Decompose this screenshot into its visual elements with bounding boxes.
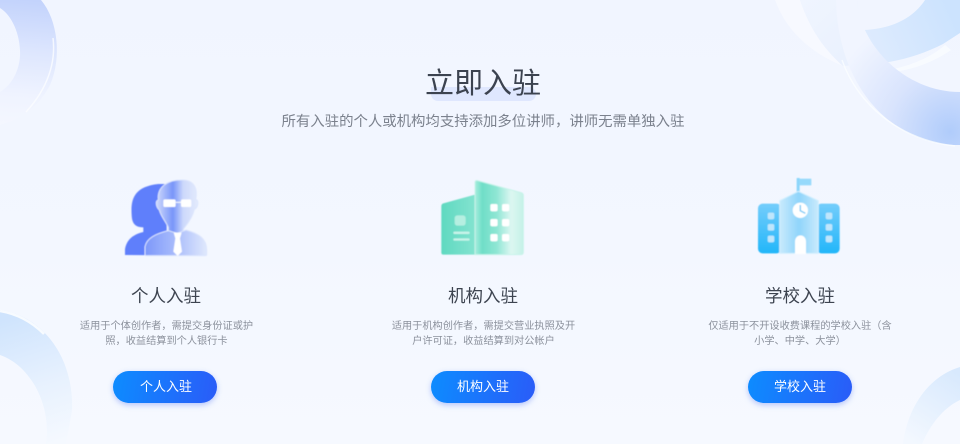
button: [748, 371, 852, 403]
icon: two people: [124, 180, 208, 256]
button: [431, 371, 535, 403]
subtitle: 所有入驻的个人或机构均支持添加多位讲师，讲师无需单独入驻: [282, 114, 684, 130]
heading: 个人入驻: [131, 286, 201, 306]
title: [425, 68, 541, 101]
button: 机构入驻: [457, 379, 509, 394]
description: 照，收益结算到个人银行卡: [105, 336, 228, 347]
description: [80, 320, 253, 347]
description: 小学、中学、大学）: [754, 336, 846, 347]
button: 学校入驻: [774, 379, 826, 394]
button: [113, 371, 217, 403]
description: 适用于机构创作者，需提交营业执照及开: [392, 321, 575, 332]
icon: office building: [440, 180, 524, 256]
description: [708, 320, 892, 347]
ring bottom left: [0, 310, 72, 444]
description: [392, 320, 575, 347]
description: 适用于个体创作者，需提交身份证或护: [80, 321, 253, 332]
panel: school: [708, 177, 892, 408]
ring bottom right: [903, 367, 960, 444]
description: 户许可证，收益结算到对公帐户: [412, 336, 555, 347]
icon: school building: [757, 177, 840, 254]
panel: institution: [392, 180, 575, 408]
button: 个人入驻: [140, 379, 192, 394]
panel: personal: [80, 180, 253, 408]
ring top right: [775, 0, 960, 146]
heading: 学校入驻: [765, 286, 835, 306]
title text: 立即入驻: [425, 68, 541, 100]
heading: 机构入驻: [448, 286, 518, 306]
ring top left: [0, 0, 57, 125]
title highlight: [431, 87, 536, 101]
description: 仅适用于不开设收费课程的学校入驻（含: [708, 321, 892, 332]
